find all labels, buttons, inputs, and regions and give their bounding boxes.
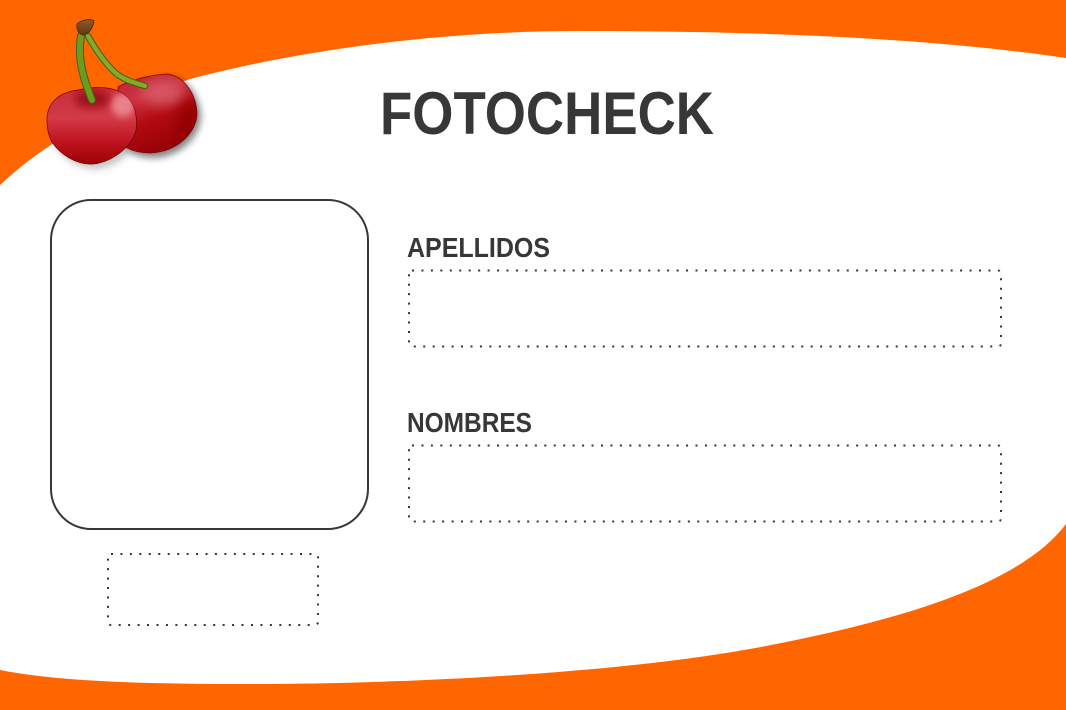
front cherry [47, 88, 137, 164]
stem knob [77, 20, 94, 35]
field: code [108, 554, 318, 625]
icon: cherries [47, 20, 202, 169]
label: nombres: NOMBRES [407, 407, 532, 438]
label: apellidos: APELLIDOS [407, 232, 550, 263]
back cherry [118, 74, 202, 153]
field: apellidos [409, 270, 1001, 346]
right stem [88, 36, 145, 86]
photo frame [51, 200, 368, 529]
field: nombres [409, 446, 1001, 522]
title: FOTOCHECK [380, 80, 714, 147]
cherry shadow [52, 77, 201, 169]
left stem [80, 36, 92, 100]
